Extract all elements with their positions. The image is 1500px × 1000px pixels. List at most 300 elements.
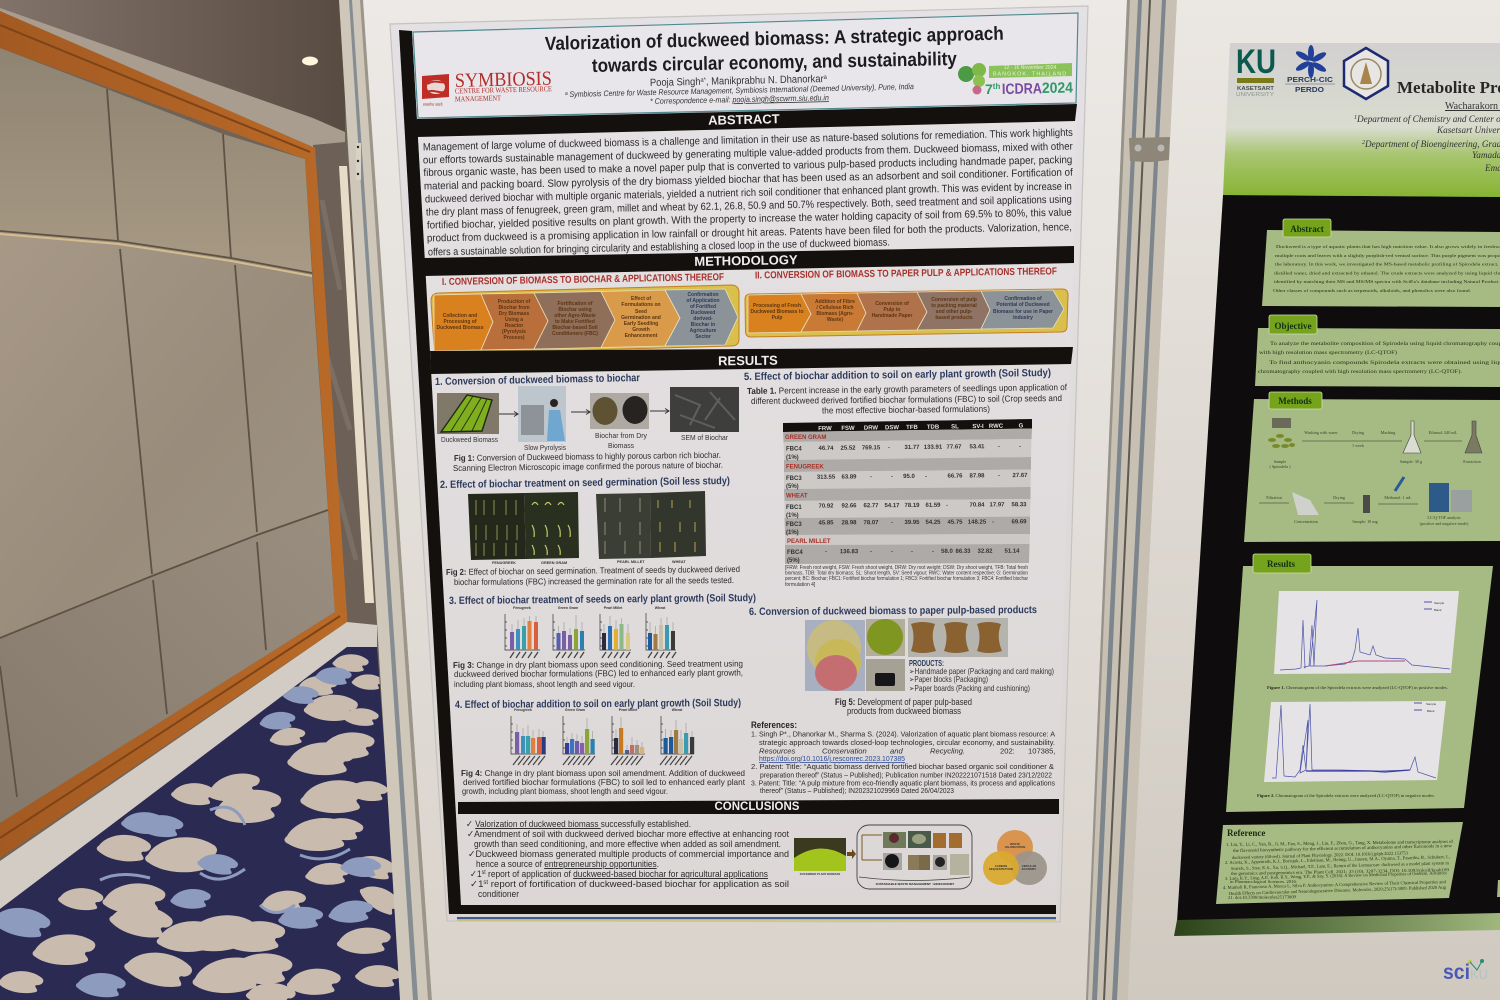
process flow I: biochar: Effect of xyxy=(631,296,651,302)
process flow II: paper pulp: Duckweed Biomass to xyxy=(750,309,804,315)
products list: ➢Handmade paper (Packaging and card making) xyxy=(909,667,1054,676)
figure 1 caption: Fig 1: Conversion of Duckweed biomass to highly porous carbon rich biochar. xyxy=(454,450,721,463)
table legend: formulation 4] xyxy=(785,582,816,588)
table rows: 92.66 xyxy=(841,503,857,509)
section 6: paper pulp products xyxy=(749,604,1054,716)
table rows: (5%) xyxy=(787,558,800,564)
table rows: 66.76 xyxy=(947,474,963,480)
photo: handmade paper discs xyxy=(805,620,865,691)
table header row: FSW xyxy=(841,426,855,432)
poster title and authors xyxy=(1354,78,1500,173)
methodology heading bar: METHODOLOGY xyxy=(694,252,798,269)
results panel: Results xyxy=(1267,559,1295,569)
table rows: 25.52 xyxy=(840,446,856,452)
section 4: soil addition: 4. Effect of biochar addition to soil on early plant growth (Soil Study) xyxy=(455,697,741,711)
references: Conservation xyxy=(822,746,867,756)
methods step 2 diagram xyxy=(1259,477,1472,526)
figure 5 caption: products from duckweed biomass xyxy=(847,706,962,716)
table rows: FBC1 xyxy=(786,505,802,511)
conclusions list: st xyxy=(482,870,486,876)
photo labels: Biomass xyxy=(608,441,634,450)
photo: SEM xyxy=(670,387,739,432)
PERCH-CIC logo xyxy=(1285,45,1335,94)
process flow II: paper pulp: Pulp to xyxy=(884,307,900,313)
PERCH-CIC logo: PERCH-CIC xyxy=(1287,75,1334,84)
table rows: (5%) xyxy=(786,484,799,490)
references: Recycling. xyxy=(930,746,965,756)
section 2: seed germination: 2. Effect of biochar treatment on seed germination (Soil less study) xyxy=(440,475,730,491)
conclusion graphic: venn diagram: SEQUESTRATION xyxy=(989,867,1013,871)
process flow I: biochar: to Make Fortified xyxy=(555,319,595,325)
black background xyxy=(1177,195,1500,922)
methods step 2 diagram: LC/Q-TOF analysis xyxy=(1427,515,1461,520)
process flow I: biochar: Reactor xyxy=(505,323,523,329)
figure 3 caption: duckweed derived biochar formulations (FBC) led to enhanced early plant growth, xyxy=(454,667,743,679)
abstract panel xyxy=(1262,219,1500,307)
title: Valorization of duckweed biomass: A strategic approach xyxy=(545,24,1004,55)
conclusion graphic: waste management flow xyxy=(857,825,972,889)
references: https://doi.org/10.1016/j.resconrec.2023.107385 xyxy=(759,754,905,763)
table rows: 87.98 xyxy=(969,473,985,479)
germination photos xyxy=(468,491,706,560)
objective panel: chromatography coupled with high resolution mass spectrometry (LC-QTOF). xyxy=(1258,368,1462,375)
references: 107385, xyxy=(1028,746,1055,756)
photo: green disc xyxy=(866,619,905,656)
chromatogram 2: Sample xyxy=(1426,702,1437,706)
reference panel: Reference xyxy=(1227,828,1265,838)
methods step 2 diagram: Filtration xyxy=(1266,495,1283,500)
process flow II: paper pulp: Addition of Fibre xyxy=(815,299,855,305)
conclusions heading bar xyxy=(458,799,1059,814)
table rows: 95.0 xyxy=(903,474,916,480)
table rows: 27.67 xyxy=(1012,473,1028,479)
references xyxy=(751,720,1056,795)
Symbiosis logo: SYMBIOSIS xyxy=(455,68,552,92)
table rows: 46.74 xyxy=(818,446,834,452)
section 4: soil addition xyxy=(455,697,746,796)
table rows: - xyxy=(870,474,872,480)
photo labels: Biochar from Dry xyxy=(595,431,647,440)
poster title and authors: 2 xyxy=(1362,140,1365,146)
reference panel: the flavonoid biosynthetic pathway for the efficient accumulation of anthocyanins and other flavonoids in a new xyxy=(1233,843,1453,853)
photo labels xyxy=(441,431,728,452)
table header row: RWC xyxy=(989,424,1004,430)
table legend xyxy=(785,565,1028,588)
results panel xyxy=(1226,554,1493,812)
figure 1 caption xyxy=(453,450,723,473)
methods panel: Methods xyxy=(1278,396,1312,406)
table legend: [FRW: Fresh root weight, FSW: Fresh shoot weight, DRW: Dry root weight; DSW: Dry shoot weight, TFB: Total fresh xyxy=(785,565,1028,571)
reference panel: 4. Mattioli R, Francioso A, Mosca L, Silva P. Anthocyanins: A Comprehensive Review of Their Chemical Properties and xyxy=(1223,879,1447,891)
table header row: SV-I xyxy=(972,424,984,430)
watermark: sciKU logo: sci xyxy=(1443,961,1470,984)
references: Resources xyxy=(759,746,795,756)
conclusions list: hence a source of entrepreneurship opportunities. xyxy=(476,859,659,870)
process flow I: biochar: Biochar-based Soil xyxy=(552,325,598,331)
figure 2 caption xyxy=(446,564,740,587)
KU logo xyxy=(1236,43,1276,98)
photo labels: SEM of Biochar xyxy=(681,433,728,442)
process flow I: biochar: Enhancement xyxy=(625,333,658,339)
table rows: - xyxy=(911,549,913,555)
conclusion graphic: venn diagram xyxy=(983,830,1047,885)
process flow I: biochar: other Agro-Waste xyxy=(554,313,596,319)
figure 3 caption xyxy=(453,658,743,689)
conclusion graphic: venn diagram: ECONOMY xyxy=(1022,867,1036,871)
bracket xyxy=(1129,137,1170,162)
table caption: different duckweed derived fortified biochar formulations (FBC) to soil (Crop seeds and xyxy=(751,393,1062,406)
abstract text: the dry plant mass of fenugreek, green gram, millet and wheat by 62.1, 26.8, 50.9 and 50.7% respectively. Both, seed treatment and soil applications using xyxy=(426,194,1072,218)
process flow I: biochar: Duckweed Biomass xyxy=(437,325,484,331)
table rows: 70.84 xyxy=(969,502,985,509)
process flow I: biochar: Collection and xyxy=(443,313,477,319)
table rows: - xyxy=(870,549,872,555)
conclusions list: ✓ Valorization of duckweed biomass successfully established. xyxy=(466,819,691,830)
process flow I: biochar: Conditioners (FBC) xyxy=(552,331,598,337)
authors and affiliation: * Correspondence e-mail: pooja.singh@scwrm.siu.edu.in xyxy=(650,93,829,106)
patterned carpet xyxy=(0,640,410,1000)
process flow II: paper pulp: Industry xyxy=(1013,315,1033,321)
process flow I: biochar: Biochar from xyxy=(498,305,530,311)
methods step 1 diagram: Washing with water xyxy=(1304,430,1338,435)
references: strategic approach towards closed-loop technologies, circular economy, and sustainability. xyxy=(759,738,1055,747)
authors and affiliation: a xyxy=(824,74,827,81)
ICDRA logo: BANGKOK, THAILAND xyxy=(993,72,1067,78)
Symbiosis logo xyxy=(422,68,552,107)
germination labels xyxy=(492,560,686,565)
authors and affiliation: ᵃ Symbiosis Centre for Waste Resource Management, Symbiosis International (Deemed University), Pune, India xyxy=(565,82,914,99)
methods step 1 diagram: Drying xyxy=(1352,430,1365,435)
photo: paper block xyxy=(866,659,905,691)
process flow II: paper pulp: Confirmation of xyxy=(1004,296,1042,302)
table caption: the most effective biochar-based formulations) xyxy=(822,404,990,415)
abstract panel: the laboratory. In this work, we investigated the MS-based metabolic profiling of Spirodela extract, and xyxy=(1275,262,1500,268)
table legend: biomass, TDB: Total dry biomass; SL: Shoot length, SV: Seed vigour; RWC: Water content respective; G: Germination xyxy=(785,570,1028,576)
KU logo: KASETSART xyxy=(1237,86,1274,92)
process flow II: paper pulp xyxy=(745,289,1068,337)
section 1: biochar conversion xyxy=(435,372,739,473)
Symbiosis logo: MANAGEMENT xyxy=(455,93,501,103)
process flow II: paper pulp: Biomass for use in Paper xyxy=(993,309,1053,315)
chromatogram 2: Blank xyxy=(1427,709,1435,713)
table rows: 148.25 xyxy=(968,520,987,526)
table header row: TDB xyxy=(927,425,940,431)
methods panel xyxy=(1244,392,1500,542)
left stand post xyxy=(339,0,432,1000)
abstract text: fibrous organic waste, has been used to make a novel paper pulp that is converted to various pulp-based products including handmade paper, packing xyxy=(423,154,1073,179)
header box xyxy=(413,13,1078,118)
photo labels: Duckweed Biomass xyxy=(441,435,498,444)
watermark: sciKU logo xyxy=(1443,959,1488,984)
conclusions list xyxy=(466,819,789,900)
process flow II: paper pulp: Conversion of xyxy=(875,301,909,307)
table rows: 28.98 xyxy=(841,520,857,526)
bar charts: soil amendment: Fenugreek xyxy=(514,708,532,712)
abstract text: offers a sustainable solution for bringing circularity and establishing a closed loop in the use of duckweed biomass. xyxy=(428,237,890,258)
conclusions list: report of application of xyxy=(486,869,573,880)
abstract text: fortified biochar, yielded positive results on plant growth. With the property to increase the water holding capacity of soil from 69.5% to 80%, this value xyxy=(427,207,1072,231)
ceiling lamp xyxy=(302,56,318,66)
process flow I: biochar: Formulations on xyxy=(621,302,661,308)
table rows: GREEN GRAM xyxy=(785,435,826,441)
abstract panel: Abstract xyxy=(1290,224,1324,234)
abstract text: material and packing board. Slow pyrolysis of the dry biomass yielded biochar that has been used as an adsorbent and soil conditioner. Fortification of xyxy=(424,167,1073,192)
conclusion graphic: waste management flow: SUSTAINABLE WASTE MANAGEMENT : BIOECONOMY xyxy=(876,882,954,886)
process flow I: biochar: Confirmation xyxy=(687,292,719,298)
bar charts: soil amendment: Green Gram xyxy=(565,708,585,712)
table rows: 54.17 xyxy=(884,503,900,509)
germination labels: FENUGREEK xyxy=(492,561,516,565)
conclusions heading bar: CONCLUSIONS xyxy=(715,801,800,813)
figure 3 caption: including plant biomass, shoot length and seed vigour. xyxy=(454,679,635,689)
table rows xyxy=(785,435,1028,564)
table rows: 133.91 xyxy=(924,445,943,451)
PERCH-CIC logo: PERDO xyxy=(1295,85,1324,94)
ICDRA logo: ICDRA xyxy=(1002,80,1042,98)
arrows xyxy=(499,408,669,416)
table rows: - xyxy=(998,473,1000,479)
ICDRA logo: th xyxy=(993,82,1000,91)
table rows: - xyxy=(946,503,948,509)
abstract text: our efforts towards sustainable management of duckweed by generating multiple value-added products from them. Duckweed biomass, mixed with other xyxy=(423,141,1073,166)
table header row: TFB xyxy=(906,425,919,431)
objective panel xyxy=(1255,315,1500,387)
conclusions list: duckweed-based biochar for agricultural applications xyxy=(573,869,768,880)
bar charts: seed conditioning: Fenugreek xyxy=(513,606,531,610)
table rows: 61.59 xyxy=(925,503,941,509)
process flow II: paper pulp: Pulp xyxy=(772,315,782,321)
conclusions list: ✓Duckweed biomass generated multiple products of commercial importance and xyxy=(468,849,789,860)
header gradient band xyxy=(1223,43,1500,197)
photo: duckweed tray xyxy=(437,393,499,434)
figure 1 caption: Scanning Electron Microscopic image confirmed the porous nature of biochar. xyxy=(453,460,723,473)
references: thereof” (Status – Published); IN202321029969 Dated 26/04/2023 xyxy=(760,786,954,795)
figure 4 caption: growth, including plant biomass, shoot length and seed vigour. xyxy=(462,786,668,796)
figure 4 caption xyxy=(461,768,746,796)
ICDRA logo: 12 - 16 November 2024 xyxy=(1004,65,1056,71)
table rows: - xyxy=(891,520,893,526)
conclusion graphic: venn diagram: VALORIZATION xyxy=(1005,845,1025,849)
figure 1 caption: Figure 1. Chromatogram of the Spirodela extracts were analyzed (LC-QTOF) in positive modes. xyxy=(1267,685,1448,690)
references: 3. Patent: Title: “A pulp mixture from eco-friendly aquatic plant biomass, its process and applications xyxy=(751,778,1055,788)
process flow I: biochar: Duckweed xyxy=(691,310,715,316)
conclusions list: report of fortification of duckweed-based biochar for application as soil xyxy=(488,879,789,890)
data table xyxy=(783,419,1032,588)
chromatogram 1 xyxy=(1274,591,1459,674)
bar charts: seed conditioning xyxy=(505,606,676,658)
table header row: DRW xyxy=(864,425,878,432)
conclusion graphic: duckweed pond photo: DUCKWEED PLANT BIOMASS xyxy=(800,872,840,876)
results heading bar: RESULTS xyxy=(718,353,778,368)
table caption: Table 1. Percent increase in the early growth parameters of seedlings upon application of xyxy=(747,382,1068,396)
references: 202: xyxy=(1000,746,1015,756)
process flow I: biochar: Biochar using xyxy=(558,307,592,313)
objective panel: To analyze the metabolite composition of Spirodela using liquid chromatography coupled xyxy=(1270,340,1500,347)
process flow I: biochar: Germination and xyxy=(621,315,661,321)
reference panel: 1. Liu, Y., Li, C., Yan, R., Ji, M., Fan, S., Meng, J., Liu, F., Zhou, G., Tang, X. Metabolome and transcriptome analyses of xyxy=(1226,839,1454,848)
abstract panel: multiple roots and leaves with a slightly purplish-red ventral surface. This purple pigment was proposed xyxy=(1275,253,1500,258)
figure 2 caption: biochar formulations (FBC) increased the germination rate for all the seeds tested. xyxy=(454,575,734,587)
table rows: 78.07 xyxy=(863,520,879,526)
table rows: PEARL MILLET xyxy=(787,539,831,545)
figure 2 caption: Fig 2: Effect of biochar on seed germination. Treatment of seeds by duckweed derived xyxy=(446,564,740,577)
process flow II: paper pulp: and other pulp- xyxy=(936,309,973,315)
abstract heading bar xyxy=(417,104,1077,137)
process flow II: paper pulp: based products xyxy=(935,315,973,321)
objective panel: with high resolution mass spectrometry (LC-QTOF) xyxy=(1259,349,1397,356)
bottom black band xyxy=(449,905,1056,920)
table rows: 45.75 xyxy=(947,520,963,526)
abstract panel: identified by matching their MS and MS/MS spectra with SciEx's database including Natural Product and xyxy=(1274,279,1500,284)
ceiling xyxy=(0,0,345,137)
ICDRA logo xyxy=(958,63,1074,98)
reference panel xyxy=(1216,822,1463,904)
figure 4 caption: derived fortified biochar formulations (FBC) to soil led to enhanced early plant xyxy=(463,777,746,787)
neighbouring poster xyxy=(1174,43,1500,936)
table rows: 77.67 xyxy=(946,444,962,451)
process flow II: paper pulp: Waste) xyxy=(827,317,843,323)
table rows: 54.25 xyxy=(925,520,941,526)
products list xyxy=(909,659,1054,693)
references: 2. Patent: Title: “Aquatic biomass derived fortified biochar based organic soil conditioner & xyxy=(751,762,1054,771)
conclusion graphic: duckweed pond photo xyxy=(794,838,856,876)
section 5: soil study table xyxy=(744,367,1068,588)
table rows: - xyxy=(891,549,893,555)
main display board xyxy=(363,0,1127,1000)
methods step 2 diagram: Sample: 10 mg xyxy=(1352,519,1379,524)
process flow II: paper pulp: Processing of Fresh xyxy=(753,303,801,309)
figure 5 caption: Fig 5: Development of paper pulp-based xyxy=(835,697,972,707)
figure 3 caption: Fig 3: Change in dry plant biomass upon seed conditioning. Seed treatment using xyxy=(453,658,743,670)
conclusion graphic: venn diagram: WASTE xyxy=(1010,842,1020,846)
figure 4 caption: Fig 4: Change in dry plant biomass upon soil amendment. Addition of duckweed xyxy=(461,768,745,778)
methodology heading bar xyxy=(424,246,1074,276)
methods step 1 diagram: 1 week xyxy=(1352,443,1365,448)
process flow II: paper pulp: Potential of Duckweed xyxy=(996,302,1050,308)
small panel at right edge xyxy=(1497,880,1500,897)
process flow I: biochar: (Pyrolysis xyxy=(502,329,526,335)
authors and affiliation: Pooja Singh xyxy=(650,76,707,89)
section 3: seed treatment xyxy=(449,592,756,689)
title: towards circular economy, and sustainability xyxy=(592,49,957,77)
conclusions list: growth than seed conditioning, and more effective when added as soil amendment. xyxy=(474,839,781,850)
table rows: 70.92 xyxy=(818,504,834,510)
products list: PRODUCTS: xyxy=(909,659,944,668)
references: preparation thereof” (Status – Published); Publication number IN202221071518 Dated 23/12/2022 xyxy=(760,770,1052,780)
process flow I: biochar: derived- xyxy=(693,316,713,322)
background: hotel corridor wall xyxy=(0,0,410,1000)
table rows: (1%) xyxy=(786,455,799,461)
poster title and authors: 1 xyxy=(1354,115,1357,121)
methods step 1 diagram: ( Spirodela ) xyxy=(1270,464,1291,469)
abstract text xyxy=(423,127,1073,258)
table rows: 53.41 xyxy=(969,444,985,450)
table rows: 313.55 xyxy=(817,475,836,481)
table rows: FBC4 xyxy=(787,550,803,556)
white vertical strip behind stand xyxy=(339,166,374,603)
objective panel: To find anthocyanin compounds Spirodela extracts were obtained using liquid xyxy=(1269,359,1500,366)
table header row: SL xyxy=(951,424,959,430)
abstract panel: distilled water, dried and extracted by ethanol. The crude extracts were analyzed by using liquid chrom xyxy=(1274,270,1500,276)
references: 1. Singh P*., Dhanorkar M., Sharma S. (2024). Valorization of aquatic plant biomass resource: A xyxy=(751,730,1056,738)
bar charts: seed conditioning: Green Gram xyxy=(558,606,578,610)
process flow I: biochar: Early Seedling xyxy=(624,321,658,327)
reference panel: the genomics and postgenomics era. The Plant Cell. 2021; 33 (10), 3207-3234. DOI: 10.1093/plcell/koab189 xyxy=(1231,867,1450,877)
table header row: DSW xyxy=(885,425,899,431)
process flow I: biochar: Production of xyxy=(498,299,531,305)
methods step 1 diagram: Sample: 30 g xyxy=(1400,459,1423,464)
products list: ➢Paper boards (Packing and cushioning) xyxy=(909,684,1030,693)
left black stripe xyxy=(399,30,463,914)
conclusion graphic: venn diagram: CARBON xyxy=(995,864,1007,868)
bar charts: seed conditioning: Wheat xyxy=(655,606,666,610)
process flow I: biochar: Biochar in xyxy=(691,322,715,328)
reference panel: Health Effects on Cardiovascular and Neurodegenerative Diseases. Molecules. 2020;25(17):3809. Published 2020 Aug xyxy=(1229,885,1447,896)
bar charts: soil amendment: Wheat xyxy=(672,708,683,712)
chromatogram 1: Sample xyxy=(1434,601,1445,605)
methods step 1 diagram: Sample xyxy=(1274,459,1286,464)
process flow I: biochar xyxy=(431,285,739,354)
methods step 2 diagram: Drying xyxy=(1333,495,1346,500)
table rows: 58.0 xyxy=(941,549,954,555)
table legend: percent; BC: Biochar; FBC1: Fortified biochar formulation 1; FBC3: Fortified biochar formulation 3; FBC4: Fortified biochar xyxy=(785,576,1028,582)
ICDRA logo: 2024 xyxy=(1042,79,1074,97)
method II heading: II. CONVERSION OF BIOMASS TO PAPER PULP & APPLICATIONS THEREOF xyxy=(755,266,1057,281)
table rows: - xyxy=(891,474,893,480)
table rows: - xyxy=(932,549,934,555)
process flow I: biochar: of Fortified xyxy=(690,304,716,310)
photo labels: Slow Pyrolysis xyxy=(524,443,566,452)
bottom green band xyxy=(1174,913,1500,936)
table rows: FBC3 xyxy=(786,522,802,528)
methods step 2 diagram: Concentration xyxy=(1294,519,1319,524)
chromatogram 1: Blank xyxy=(1434,608,1442,612)
photo: slow pyrolysis xyxy=(518,386,566,442)
methods step 1 diagram: Extraction xyxy=(1463,459,1482,464)
table rows: - xyxy=(925,474,927,480)
table header row: G xyxy=(1019,423,1024,429)
KU logo: UNIVERSITY xyxy=(1236,92,1274,98)
figure 5 caption xyxy=(835,697,972,716)
process flow I: biochar: Sector xyxy=(695,334,711,340)
KU logo: KU xyxy=(1236,43,1276,81)
process flow II: paper pulp: to packing material xyxy=(931,303,977,309)
process flow I: biochar: Dry Biomass xyxy=(499,311,529,317)
ICDRA logo: 7 xyxy=(985,81,993,97)
germination labels: PEARL MILLET xyxy=(617,560,645,564)
main poster xyxy=(390,6,1088,922)
germination labels: GREEN GRAM xyxy=(541,561,567,565)
abstract panel: Other classes of compounds such as terpenoids, alkaloids, and phenolics were also found. xyxy=(1273,288,1471,294)
method I heading: I. CONVERSION OF BIOMASS TO BIOCHAR & APPLICATIONS THEREOF xyxy=(442,272,724,288)
logos xyxy=(1236,43,1388,99)
bar charts: soil amendment: Pearl Millet xyxy=(619,708,638,712)
title xyxy=(545,24,1004,77)
process flow I: biochar: of Application xyxy=(686,298,720,304)
university seal xyxy=(1344,48,1388,99)
abstract heading bar: ABSTRACT xyxy=(708,111,780,128)
table rows: FENUGREEK xyxy=(786,464,824,470)
figure 2 caption: Figure 2. Chromatogram of the Spirodela extracts were analyzed (LC-QTOF) in negative modes. xyxy=(1257,793,1435,798)
reference panel: 3. Lam, K.Y., Ling, A.P., Koh, R.Y., Wong, Y.P., & Say, Y. (2016). A Review on Medicinal Properties of Orientin. Advances xyxy=(1225,870,1447,882)
process flow I: biochar: Process) xyxy=(503,335,525,341)
conclusions list: conditioner xyxy=(478,889,520,900)
process flow II: paper pulp: Handmade Paper xyxy=(872,313,912,319)
process flow I: biochar: Processing of xyxy=(443,319,477,325)
table caption xyxy=(747,382,1068,415)
process flow I: biochar: Growth xyxy=(632,327,650,333)
abstract text: Management of large volume of duckweed biomass is a challenge and limitation in their use as nature-based solutions for remediation. This work highlights xyxy=(423,127,1073,153)
